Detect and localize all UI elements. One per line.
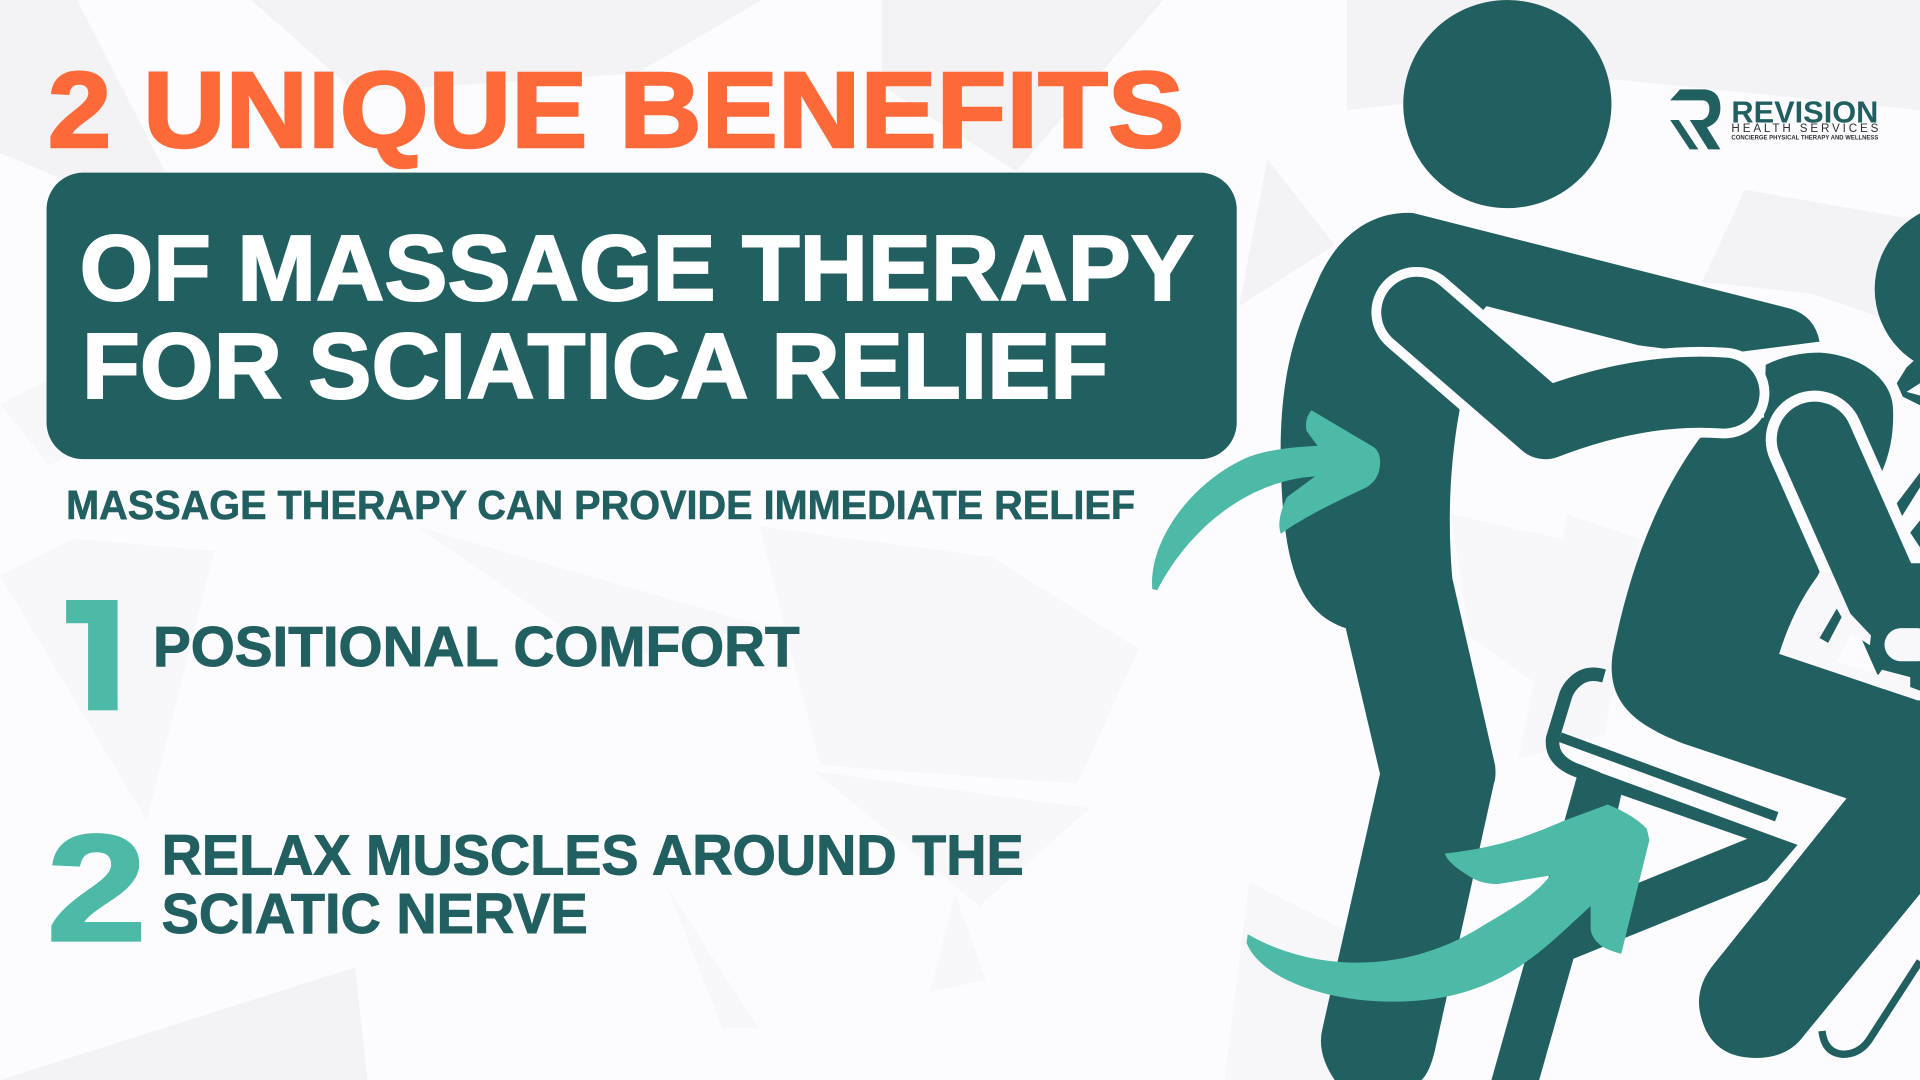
number 2: 2 [47,804,147,973]
number 1: 1 [58,574,129,743]
therapist arm [1417,312,1724,424]
title: 2 unique benefits: 2 UNIQUE BENEFITS [48,49,1184,170]
patient arm [1815,440,1920,710]
chair [1491,674,1798,1080]
lower body cover [1779,654,1920,784]
logo name: REVISION [1731,95,1878,129]
patient head [1875,203,1920,375]
logo: Revision Health Services [1670,89,1879,149]
benefit 2 [47,804,1024,973]
therapist body [1281,213,1820,1080]
panel: heading banner [47,173,1237,459]
footrest [1822,961,1920,1054]
lap gap [1779,572,1920,700]
heading line 2: FOR SCIATICA RELIEF [82,314,1108,418]
benefit 1 label: POSITIONAL COMFORT [153,615,800,678]
benefit 2 label: RELAX MUSCLES AROUND THE [162,823,1024,886]
patient body [1612,416,1920,1058]
arrow: upper teal arrow [1152,410,1380,590]
therapist head [1403,0,1611,208]
heading line 1: OF MASSAGE THERAPY [80,216,1194,320]
patient hand details [1820,609,1920,661]
patient shoulder [1763,353,1893,514]
number 1 [66,600,118,710]
benefit 1 [66,600,800,710]
logo mark [1670,89,1720,149]
wedge beside arm [1910,520,1920,547]
patient neck detail [1897,355,1920,405]
logo services line: HEALTH SERVICES [1731,122,1879,135]
logo tagline: CONCIERGE PHYSICAL THERAPY AND WELLNESS [1731,135,1878,142]
subheading: MASSAGE THERAPY CAN PROVIDE IMMEDIATE RELIEF [66,482,1135,528]
illustration: massage pictogram [1152,0,1920,1080]
benefit 2 label: SCIATIC NERVE [162,882,588,945]
right edge of patient lap [1910,563,1920,600]
arrow: lower teal arrow [1247,804,1649,1002]
dark sliver right of arm [1897,473,1920,517]
